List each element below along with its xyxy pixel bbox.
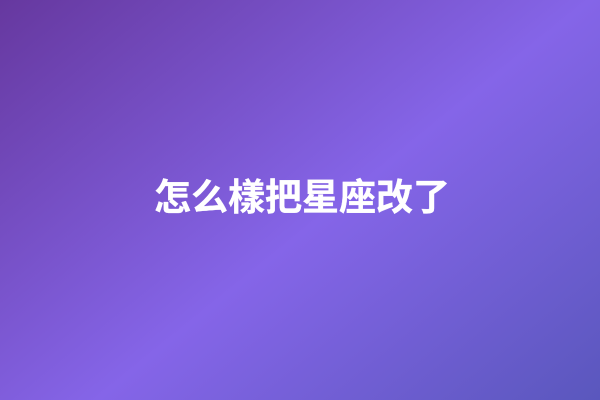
title: 怎么樣把星座改了 — [154, 177, 450, 218]
